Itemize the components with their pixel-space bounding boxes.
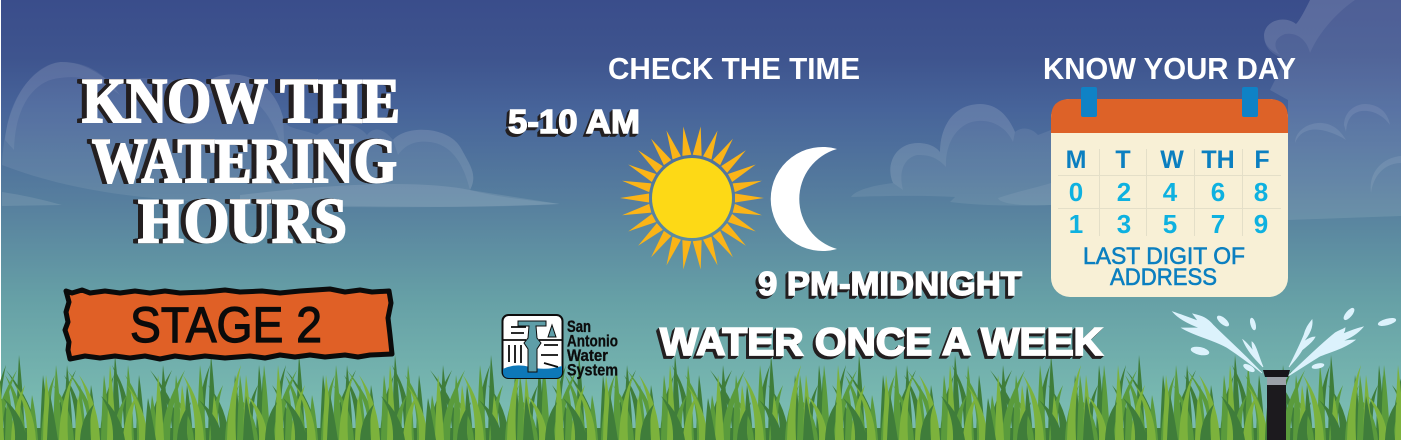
cloud: middle right xyxy=(851,104,1051,206)
title: HOURS xyxy=(138,186,347,256)
odd digits: 9 xyxy=(1254,209,1268,239)
logo wordmark xyxy=(567,318,618,380)
weekday headers: M xyxy=(1066,146,1086,174)
grass xyxy=(0,355,1401,440)
cloud: left xyxy=(2,62,560,207)
calendar tabs xyxy=(1081,87,1258,117)
even digits: 2 xyxy=(1117,177,1131,207)
odd digits xyxy=(1069,209,1268,239)
sprinkler collar xyxy=(1267,377,1286,385)
label: water once a week: WATER ONCE A WEEK xyxy=(660,321,1103,364)
even digits xyxy=(1069,177,1268,207)
even digits: 8 xyxy=(1254,177,1268,207)
heading: check the time: CHECK THE TIME xyxy=(608,51,860,86)
stage 2 sign xyxy=(65,289,392,359)
weekday headers: TH xyxy=(1201,146,1235,174)
even digits: 4 xyxy=(1163,177,1178,207)
sprinkler head xyxy=(1263,370,1290,377)
label: morning hours: 5-10 AM xyxy=(508,103,640,140)
title: KNOW THE xyxy=(82,66,400,136)
weekday headers: F xyxy=(1254,146,1270,174)
sign board xyxy=(65,289,392,359)
logo wordmark: Water xyxy=(567,347,609,365)
sign text: STAGE 2 xyxy=(130,297,322,353)
title: WATERING xyxy=(92,126,397,196)
caption: last digit of address: ADDRESS xyxy=(1110,264,1217,291)
logo wordmark: System xyxy=(567,362,618,380)
caption: last digit of address xyxy=(1083,243,1245,291)
logo wordmark: San xyxy=(567,318,591,336)
weekday headers: T xyxy=(1115,146,1131,174)
calendar xyxy=(1051,87,1288,297)
odd digits: 1 xyxy=(1069,209,1083,239)
calendar body xyxy=(1051,99,1288,297)
odd digits: 7 xyxy=(1211,209,1225,239)
logo mark xyxy=(502,315,562,378)
title xyxy=(82,66,400,256)
clouds xyxy=(2,0,1401,220)
calendar header xyxy=(1051,99,1288,133)
caption: last digit of address: LAST DIGIT OF xyxy=(1083,243,1245,270)
water spray xyxy=(1173,307,1396,376)
even digits: 0 xyxy=(1069,177,1083,207)
cloud: far right xyxy=(1264,0,1401,220)
sprinkler xyxy=(1173,307,1396,440)
odd digits: 3 xyxy=(1117,209,1131,239)
weekday headers xyxy=(1066,146,1270,174)
logo: San Antonio Water System xyxy=(502,315,618,380)
label: evening hours: 9 PM-MIDNIGHT xyxy=(758,265,1022,302)
sprinkler body xyxy=(1267,384,1286,440)
odd digits: 5 xyxy=(1163,209,1177,239)
icon: moon xyxy=(771,147,837,251)
weekday headers: W xyxy=(1160,146,1184,174)
icon: sun xyxy=(620,126,764,270)
heading: know your day: KNOW YOUR DAY xyxy=(1043,51,1296,86)
logo wordmark: Antonio xyxy=(567,332,618,350)
even digits: 6 xyxy=(1211,177,1225,207)
